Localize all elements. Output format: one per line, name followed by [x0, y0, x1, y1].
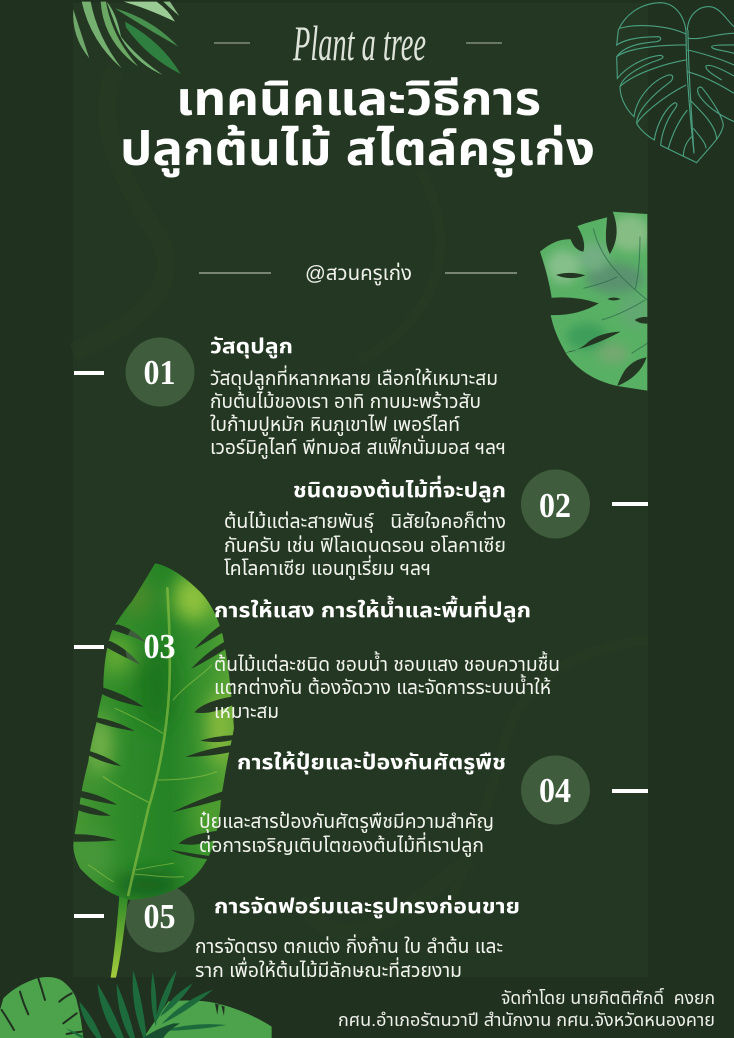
item 02	[224, 470, 648, 581]
handle: @สวนครูเก่ง: @สวนครูเก่ง	[305, 261, 412, 286]
heading 05: การจัดฟอร์มและรูปทรงก่อนขาย	[214, 895, 520, 919]
bottom palm leaflets	[66, 970, 227, 1038]
body 02: กันครับ เช่น ฟิโลเดนดรอน อโลคาเซีย	[224, 534, 506, 557]
title: เทคนิคและวิธีการ	[176, 72, 541, 125]
dash 02	[612, 502, 648, 506]
number circle 02	[521, 470, 590, 538]
number 04: 04	[539, 771, 571, 810]
heading 01: วัสดุปลูก	[210, 335, 293, 359]
title: ปลูกต้นไม้ สไตล์ครูเก่ง	[120, 122, 595, 177]
dash 01	[74, 371, 104, 375]
footer credit: กศน.อำเภอรัตนวาปี สำนักงาน กศน.จังหวัดหนองคาย	[338, 1010, 715, 1030]
dash 04	[612, 789, 648, 793]
body 04: ต่อการเจริญเติบโตของต้นไม้ที่เราปลูก	[199, 832, 484, 858]
number circle 01	[126, 338, 194, 406]
footer credit	[338, 988, 715, 1030]
item 04	[199, 751, 648, 858]
ghost leaves background pattern	[73, 70, 648, 932]
body 01	[210, 365, 506, 460]
body 05: การจัดตรง ตกแต่ง กิ่งก้าน ใบ ลำต้น และ	[195, 934, 503, 958]
dash 03	[74, 645, 104, 649]
icon: banana leaf	[73, 563, 234, 978]
body 03: แตกต่างกัน ต้องจัดวาง และจัดการระบบน้ำให้	[214, 674, 551, 699]
number 02: 02	[539, 486, 571, 525]
body 05: ราก เพื่อให้ต้นไม้มีลักษณะที่สวยงาม	[195, 957, 462, 982]
bottom monstera leaf	[0, 977, 83, 1038]
title	[120, 72, 595, 177]
body 01: เวอร์มิคูไลท์ พีทมอส สแฟ็กนั่มมอส ฯลฯ	[210, 435, 506, 460]
body 02: ต้นไม้แต่ละสายพันธุ์ นิสัยใจคอก็ต่าง	[224, 510, 506, 533]
icon: watercolor monstera leaf right	[540, 212, 648, 391]
dash 05	[74, 914, 104, 918]
bottom wide leaf	[143, 1001, 272, 1038]
body 02	[224, 510, 506, 581]
icon: palm leaves top left	[73, 2, 181, 75]
number circle 05	[126, 884, 194, 952]
body 03: เหมาะสม	[214, 701, 279, 723]
panel: inner lighter background	[73, 3, 648, 977]
body 02: โคโลคาเซีย แอนทูเรี่ยม ฯลฯ	[224, 555, 431, 581]
body 01: กับต้นไม้ของเรา อาทิ กาบมะพร้าวสับ	[210, 390, 481, 413]
icon: outline monstera leaf top right	[617, 3, 734, 163]
item 01	[74, 335, 506, 460]
leaf stem	[111, 896, 128, 978]
number 05: 05	[144, 897, 176, 936]
item 05	[74, 895, 520, 982]
icon: bottom left leaves	[0, 970, 272, 1038]
number circle 03	[126, 614, 194, 682]
number 03: 03	[144, 627, 176, 666]
body 04: ปุ๋ยและสารป้องกันศัตรูพืชมีความสำคัญ	[199, 811, 494, 834]
heading 02: ชนิดของต้นไม้ที่จะปลูก	[293, 475, 506, 503]
body 01: ใบก้ามปูหมัก หินภูเขาไฟ เพอร์ไลท์	[210, 413, 460, 437]
footer credit: จัดทำโดย นายกิตติศักดิ์ คงยก	[501, 988, 715, 1008]
subtitle: plant a tree: Plant a tree	[292, 15, 426, 71]
number 01: 01	[144, 353, 176, 392]
body 03	[214, 651, 560, 723]
body 03: ต้นไม้แต่ละชนิด ชอบน้ำ ชอบแสง ชอบความชื้น	[214, 651, 560, 676]
body 01: วัสดุปลูกที่หลากหลาย เลือกให้เหมาะสม	[210, 365, 498, 391]
number circle 04	[521, 756, 590, 824]
heading 04: การให้ปุ๋ยและป้องกันศัตรูพืช	[237, 751, 506, 775]
heading 03: การให้แสง การให้น้ำและพื้นที่ปลูก	[214, 595, 531, 623]
body 04	[199, 811, 494, 858]
body 05	[195, 934, 503, 982]
item 03	[74, 595, 560, 723]
